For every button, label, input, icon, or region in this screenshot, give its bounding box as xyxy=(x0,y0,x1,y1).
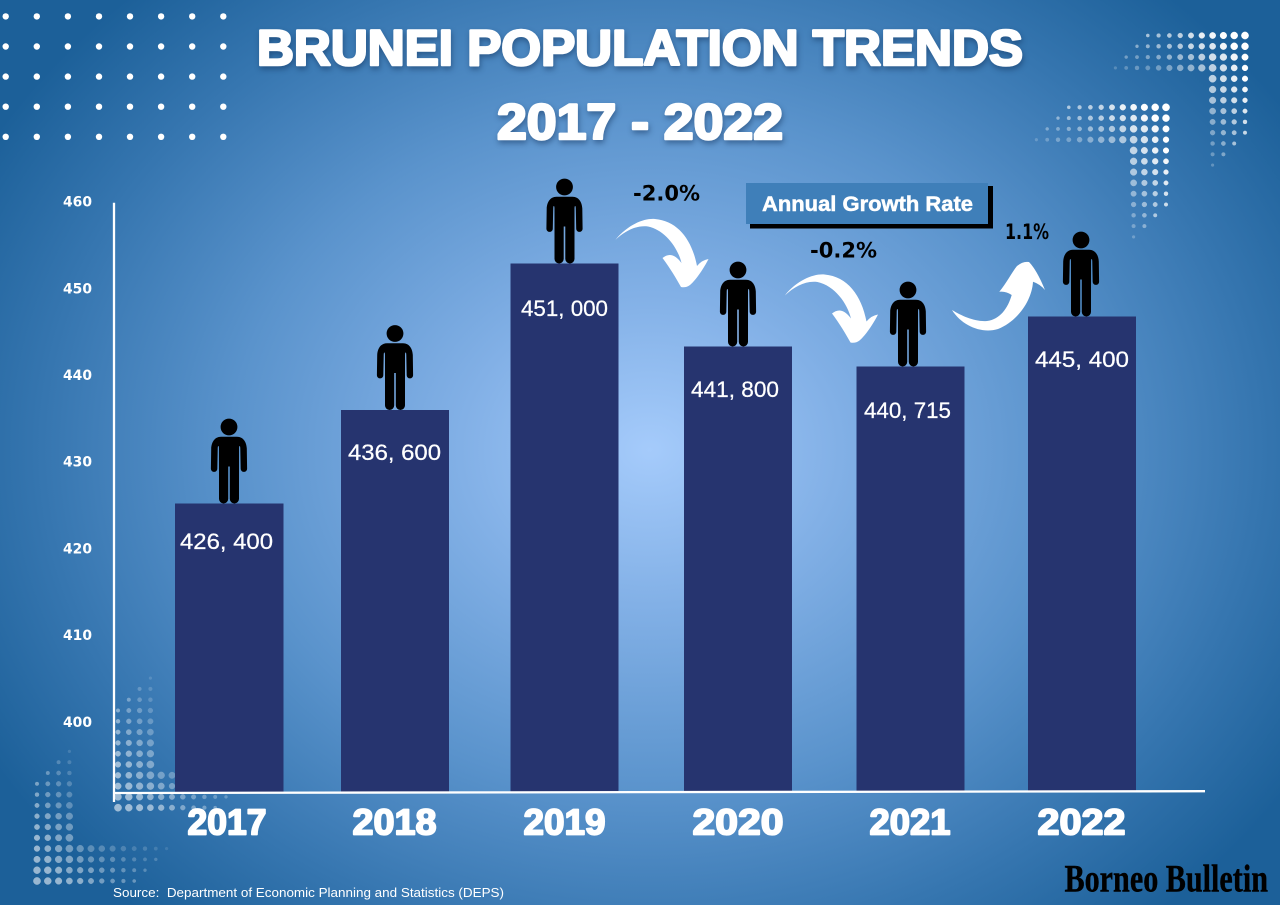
bar 2020: 441, 800 xyxy=(691,377,779,402)
legend: annual growth rate: Annual Growth Rate xyxy=(762,193,973,216)
bar 2017: 426, 400 xyxy=(180,529,273,554)
bar 2022: 445, 400 xyxy=(1035,347,1129,372)
x-axis year labels: 2020 xyxy=(692,802,784,842)
arrow: 2020 to 2021 xyxy=(785,274,878,343)
decoration: dot grid top left xyxy=(2,13,226,140)
growth rate: -2.0%: -2.0% xyxy=(633,182,700,206)
bar chart xyxy=(175,264,1136,792)
x-axis year labels xyxy=(188,802,1126,842)
source note: Source: Department of Economic Planning and Statistics (DEPS) xyxy=(113,885,504,900)
decoration: halftone corners bottom left xyxy=(33,677,249,885)
y-axis labels xyxy=(63,194,92,731)
title: 2017 - 2022 xyxy=(497,94,783,150)
y-axis labels: 460 xyxy=(63,194,92,210)
growth rate: 1.1%: 1.1% xyxy=(1005,220,1049,244)
bar 2019: 451, 000 xyxy=(521,296,608,321)
arrow: 2019 to 2020 xyxy=(615,219,708,287)
arrow: 2021 to 2022 xyxy=(952,262,1045,330)
bar 2021: 440, 715 xyxy=(864,398,951,423)
x-axis year labels: 2017 xyxy=(188,802,266,842)
x-axis year labels: 2022 xyxy=(1038,802,1126,842)
bar 2022 xyxy=(1028,316,1136,792)
growth rate: -0.2%: -0.2% xyxy=(810,238,877,262)
x-axis year labels: 2019 xyxy=(524,802,606,842)
chart axes xyxy=(113,203,1205,802)
title: BRUNEI POPULATION TRENDS xyxy=(257,20,1023,76)
bar 2019 xyxy=(510,264,618,792)
y-axis labels: 420 xyxy=(63,541,92,557)
icons: person on each bar xyxy=(211,179,1099,504)
legend: annual growth rate xyxy=(746,183,993,228)
bar 2020 xyxy=(684,346,792,792)
bar 2021 xyxy=(856,366,964,792)
y-axis labels: 450 xyxy=(63,281,92,297)
bar 2018 xyxy=(341,410,449,792)
x-axis year labels: 2021 xyxy=(870,802,950,842)
y-axis labels: 440 xyxy=(63,368,92,384)
title xyxy=(257,20,1023,150)
y-axis labels: 400 xyxy=(63,715,92,731)
bar 2018: 436, 600 xyxy=(348,440,441,465)
bar 2017 xyxy=(175,504,284,792)
x-axis year labels: 2018 xyxy=(352,802,436,842)
y-axis labels: 430 xyxy=(63,455,92,471)
decoration: halftone corners top right xyxy=(1035,32,1249,238)
y-axis labels: 410 xyxy=(63,628,92,644)
